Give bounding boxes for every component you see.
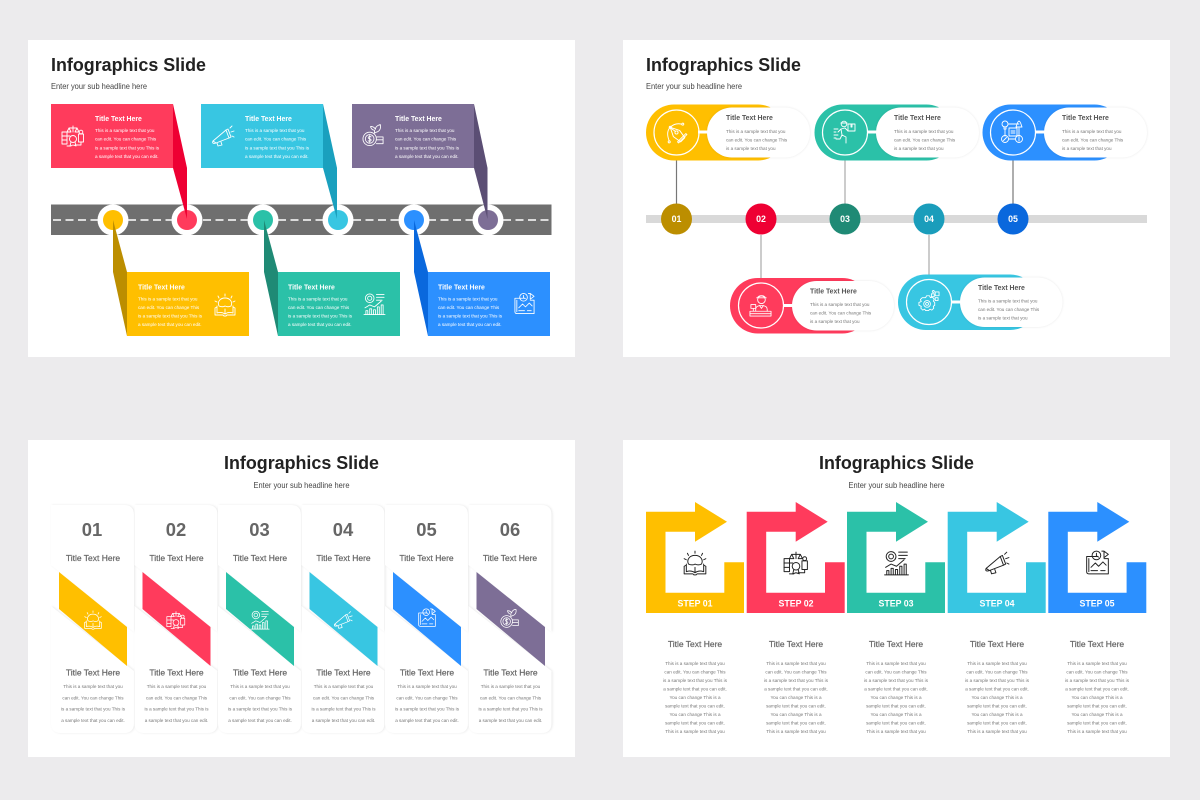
callout: step 5 blue: Title Text Here	[438, 284, 485, 292]
callout: step 3 teal: can edit. You can change This	[288, 305, 350, 310]
callout: step 6 purple: is a sample text that you This is	[395, 145, 460, 150]
step 01: sample text that you can edit.	[665, 720, 725, 726]
step 01: a sample text that you can edit.	[663, 686, 727, 692]
column 01: can edit. You can change This	[62, 696, 124, 700]
column 04: 04	[333, 519, 354, 540]
title: Infographics Slide	[51, 54, 206, 75]
callout: step 5 blue	[398, 204, 550, 336]
column 06: Title Text Here	[483, 553, 537, 563]
step 03: is a sample text that you This is	[864, 678, 929, 683]
pill 01 gold: This is a sample text that you	[726, 129, 786, 134]
step 02: This is a sample text that you	[766, 729, 826, 734]
step 04: This is a sample text that you	[967, 729, 1027, 734]
step 04: STEP 04	[979, 598, 1015, 608]
step 02: is a sample text that you This is	[764, 678, 829, 683]
marker 03: 03	[840, 214, 850, 224]
column 06	[468, 505, 552, 733]
step 05: sample text that you can edit.	[1067, 720, 1127, 726]
pill 01 gold: Title Text Here	[726, 115, 773, 122]
step 01: You can change This is a	[669, 695, 721, 700]
step 02: STEP 02	[778, 598, 814, 608]
step 04: Title Text Here	[970, 639, 1024, 649]
step 01: sample text that you can edit.	[665, 704, 725, 708]
step 05: a sample text that you can edit.	[1065, 686, 1129, 692]
step 03: You can change This is a	[870, 712, 922, 717]
step 05: is a sample text that you This is	[1065, 678, 1130, 683]
callout: step 1 gold: Title Text Here	[138, 284, 185, 292]
column 05: Title Text Here	[399, 553, 454, 563]
column 02: a sample text that you can edit.	[145, 718, 208, 723]
panel: six column ribbon slide	[28, 440, 575, 757]
callout: step 6 purple: This is a sample text that you	[395, 128, 455, 133]
title: Infographics Slide	[646, 54, 801, 75]
step 03: Title Text Here	[869, 639, 923, 649]
step 01: Title Text Here	[668, 639, 722, 649]
step 05: You can change This is a	[1071, 695, 1123, 700]
column 05: can edit. You can change This	[396, 696, 458, 700]
marker 04: 04	[924, 214, 934, 224]
column 01: Title Text Here	[66, 553, 120, 563]
pill 05 blue: can edit. You can change This	[1062, 138, 1124, 143]
marker 03	[830, 204, 860, 234]
step 03: You can change This is a	[870, 695, 922, 700]
marker 04	[914, 204, 944, 234]
pill 02 pink	[730, 235, 894, 334]
column 05	[385, 505, 468, 733]
step 03: This is a sample text that you	[866, 661, 926, 666]
step 03: sample text that you can edit.	[866, 720, 926, 726]
step 02: You can change This is a	[770, 712, 822, 717]
callout: step 1 gold: can edit. You can change This	[138, 305, 200, 310]
callout: step 4 cyan: This is a sample text that you	[245, 128, 305, 133]
step 04: sample text that you can edit.	[967, 704, 1027, 708]
column 03: Title Text Here	[233, 668, 287, 678]
column 02: This is a sample text that you	[147, 684, 207, 689]
column 04: a sample text that you can edit.	[312, 718, 375, 723]
step 04: is a sample text that you This is	[965, 678, 1030, 683]
pill 03 teal: can edit. You can change This	[894, 138, 956, 143]
callout: step 2 pink: This is a sample text that you	[95, 128, 155, 133]
panel: road timeline slide	[28, 40, 575, 357]
step 03: can edit. You can change This	[865, 670, 927, 674]
column 03: is a sample text that you This is	[228, 706, 293, 712]
callout: step 5 blue: is a sample text that you This is	[438, 314, 503, 319]
road	[51, 204, 552, 235]
pill 04 cyan: can edit. You can change This	[978, 307, 1040, 312]
step 02	[747, 502, 845, 734]
callout: step 4 cyan: a sample text that you can edit.	[245, 154, 309, 159]
column 04: Title Text Here	[316, 668, 371, 678]
column 05: a sample text that you can edit.	[395, 718, 459, 723]
panel: pill timeline slide	[623, 40, 1170, 357]
column 05: 05	[416, 519, 437, 540]
column 06: Title Text Here	[483, 668, 538, 678]
column 02: Title Text Here	[149, 668, 204, 678]
title: Infographics Slide	[224, 452, 379, 473]
step 02: You can change This is a	[770, 695, 822, 700]
step 05: You can change This is a	[1071, 712, 1123, 717]
callout: step 2 pink: can edit. You can change This	[95, 137, 157, 142]
step 04: You can change This is a	[971, 712, 1023, 717]
step 05: This is a sample text that you	[1067, 661, 1127, 666]
step 02: can edit. You can change This	[765, 670, 827, 674]
subtitle: Enter your sub headline here	[646, 82, 742, 91]
callout: step 2 pink: is a sample text that you This is	[95, 145, 160, 150]
callout: step 2 pink: Title Text Here	[95, 116, 142, 123]
step 03	[847, 502, 945, 734]
pill 05 blue: This is a sample text that you	[1062, 129, 1122, 134]
pill 03 teal	[814, 104, 979, 205]
pill 03 teal: This is a sample text that you	[894, 129, 954, 134]
column 05: Title Text Here	[400, 668, 454, 678]
column 06: can edit. You can change This	[480, 696, 542, 700]
pill 01 gold: can edit. You can change This	[726, 138, 788, 143]
column 02: Title Text Here	[149, 553, 204, 563]
subtitle: Enter your sub headline here	[848, 481, 945, 490]
pill 03 teal: Title Text Here	[894, 115, 941, 122]
column 05: is a sample text that you This is	[395, 706, 460, 712]
column 03: 03	[249, 519, 270, 540]
marker 02: 02	[756, 214, 766, 224]
step 05: sample text that you can edit.	[1067, 704, 1127, 708]
step 01	[646, 502, 744, 734]
marker 02	[746, 204, 776, 234]
pill 04 cyan: is a sample text that you	[978, 316, 1028, 320]
column 06: This is a sample text that you	[481, 684, 541, 689]
step 05: can edit. You can change This	[1066, 670, 1128, 674]
subtitle: Enter your sub headline here	[51, 82, 147, 91]
step 03: a sample text that you can edit.	[864, 686, 928, 692]
step 05: STEP 05	[1079, 598, 1115, 608]
column 03: a sample text that you can edit.	[228, 718, 292, 723]
callout: step 5 blue: a sample text that you can edit.	[438, 322, 502, 327]
panel: five step arrows slide	[623, 440, 1170, 757]
column 02: 02	[166, 519, 186, 540]
step 01: STEP 01	[677, 598, 713, 608]
callout: step 2 pink	[51, 104, 202, 236]
callout: step 6 purple: Title Text Here	[395, 116, 442, 123]
step 01: This is a sample text that you	[665, 729, 725, 734]
marker 05	[998, 204, 1028, 234]
pill 02 pink: is a sample text that you	[810, 319, 860, 324]
callout: step 4 cyan: is a sample text that you This is	[245, 145, 310, 150]
marker 01: 01	[672, 214, 681, 224]
step 05: This is a sample text that you	[1067, 729, 1127, 734]
step 04	[948, 502, 1046, 734]
callout: step 1 gold	[98, 204, 249, 336]
pill 05 blue: Title Text Here	[1062, 115, 1109, 122]
callout: step 1 gold: a sample text that you can edit.	[138, 322, 202, 327]
column 01	[51, 505, 134, 733]
column 03: This is a sample text that you	[230, 684, 290, 689]
column 06: a sample text that you can edit.	[479, 718, 542, 723]
callout: step 3 teal	[248, 204, 400, 336]
subtitle: Enter your sub headline here	[254, 481, 350, 490]
column 02: can edit. You can change This	[146, 696, 208, 700]
column 06: is a sample text that you This is	[478, 706, 543, 712]
pill 01 gold	[646, 104, 810, 205]
callout: step 5 blue: can edit. You can change This	[438, 305, 500, 310]
column 01: 01	[82, 519, 102, 540]
step 02: sample text that you can edit.	[766, 720, 826, 726]
column 04: can edit. You can change This	[313, 696, 375, 700]
step 04: This is a sample text that you	[967, 661, 1027, 666]
step 05: Title Text Here	[1070, 639, 1124, 649]
step 04: a sample text that you can edit.	[965, 686, 1029, 692]
pill 04 cyan: This is a sample text that you	[978, 298, 1038, 304]
step 01: This is a sample text that you	[665, 661, 725, 666]
pill 02 pink: Title Text Here	[810, 288, 857, 296]
pill 03 teal: is a sample text that you	[894, 146, 944, 151]
callout: step 4 cyan	[201, 104, 354, 236]
column 03: can edit. You can change This	[229, 696, 291, 700]
callout: step 2 pink: a sample text that you can edit.	[95, 154, 159, 159]
column 03: Title Text Here	[233, 553, 287, 563]
pill 05 blue: is a sample text that you	[1062, 146, 1112, 151]
pill 01 gold: is a sample text that you	[726, 146, 776, 151]
step 01: can edit. You can change This	[664, 670, 726, 674]
step 02: Title Text Here	[769, 639, 823, 649]
callout: step 4 cyan: Title Text Here	[245, 116, 292, 123]
step 03: STEP 03	[878, 598, 914, 608]
callout: step 3 teal: This is a sample text that you	[288, 296, 348, 302]
pill 02 pink: can edit. You can change This	[810, 311, 872, 316]
step 03: sample text that you can edit.	[866, 704, 926, 708]
step 01: You can change This is a	[669, 712, 721, 717]
callout: step 4 cyan: can edit. You can change This	[245, 137, 307, 142]
step 02: This is a sample text that you	[766, 661, 826, 666]
title: Infographics Slide	[819, 452, 974, 473]
step 04: sample text that you can edit.	[967, 720, 1027, 726]
callout: step 1 gold: is a sample text that you This is	[138, 314, 203, 319]
column 02: is a sample text that you This is	[144, 706, 209, 712]
step 05	[1048, 502, 1146, 734]
callout: step 1 gold: This is a sample text that you	[138, 296, 198, 302]
pill 04 cyan: Title Text Here	[978, 285, 1025, 292]
callout: step 6 purple: a sample text that you can edit.	[395, 154, 459, 159]
column 02	[134, 505, 218, 733]
step 04: You can change This is a	[971, 695, 1023, 700]
callout: step 3 teal: Title Text Here	[288, 284, 335, 292]
column 03	[218, 505, 301, 733]
column 04	[302, 505, 384, 733]
callout: step 5 blue: This is a sample text that you	[438, 296, 498, 302]
step 04: can edit. You can change This	[966, 670, 1028, 674]
pill 02 pink: This is a sample text that you	[810, 302, 870, 307]
callout: step 3 teal: is a sample text that you This is	[288, 314, 353, 319]
callout: step 6 purple: can edit. You can change This	[395, 137, 457, 142]
step 03: This is a sample text that you	[866, 729, 926, 734]
column 01: is a sample text that you This is	[61, 706, 126, 712]
step 01: is a sample text that you This is	[663, 678, 728, 683]
column 05: This is a sample text that you	[397, 684, 457, 689]
pill 04 cyan	[898, 235, 1062, 330]
column 04: Title Text Here	[316, 553, 371, 563]
pill 05 blue	[982, 104, 1147, 205]
column 04: is a sample text that you This is	[311, 706, 376, 712]
timeline bar	[646, 215, 1147, 223]
marker 01	[661, 204, 692, 234]
column 01: This is a sample text that you	[63, 684, 123, 689]
callout: step 3 teal: a sample text that you can edit.	[288, 322, 352, 327]
marker 05: 05	[1008, 214, 1018, 224]
callout: step 6 purple	[352, 104, 504, 236]
step 02: a sample text that you can edit.	[764, 686, 828, 692]
column 01: a sample text that you can edit.	[61, 718, 125, 723]
column 04: This is a sample text that you	[314, 684, 374, 689]
column 06: 06	[500, 519, 520, 540]
step 02: sample text that you can edit.	[766, 704, 826, 708]
column 01: Title Text Here	[66, 668, 120, 678]
